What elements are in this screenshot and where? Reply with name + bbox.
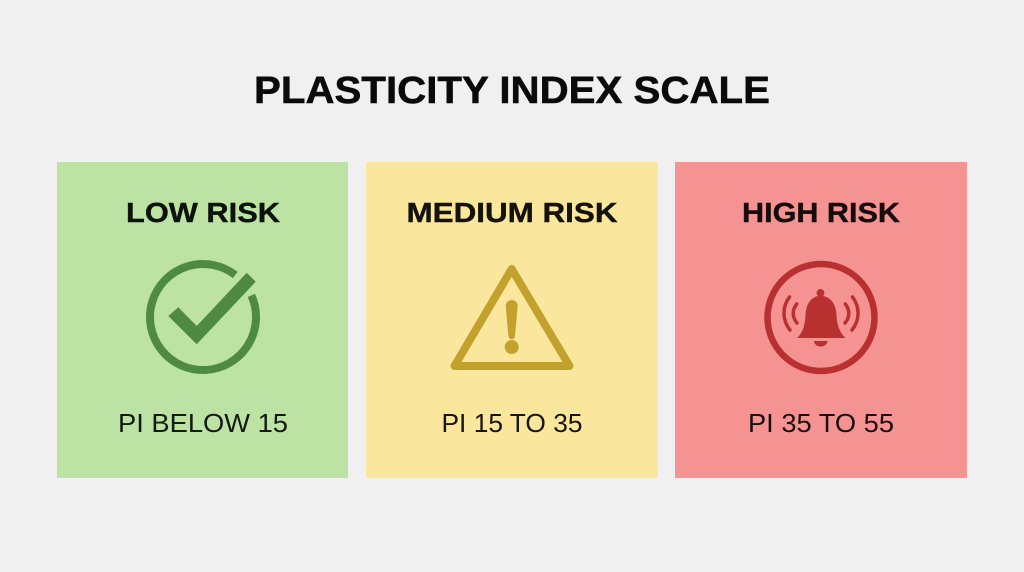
icon: warning triangle xyxy=(454,269,570,366)
text: PI below 15: PI BELOW 15 xyxy=(118,408,288,438)
icon: check mark in circle xyxy=(150,264,256,370)
icon: ringing bell in circle xyxy=(768,264,874,371)
title: PLASTICITY INDEX SCALE xyxy=(254,70,770,112)
panel: high risk xyxy=(675,162,967,478)
panel: low risk xyxy=(57,162,348,478)
heading: low risk: LOW RISK xyxy=(126,197,280,228)
heading: medium risk: MEDIUM RISK xyxy=(406,197,618,228)
text: PI 15 to 35: PI 15 TO 35 xyxy=(442,408,582,438)
panel: medium risk xyxy=(366,162,658,478)
text: PI 35 to 55: PI 35 TO 55 xyxy=(748,408,894,438)
heading: high risk: HIGH RISK xyxy=(742,197,900,228)
